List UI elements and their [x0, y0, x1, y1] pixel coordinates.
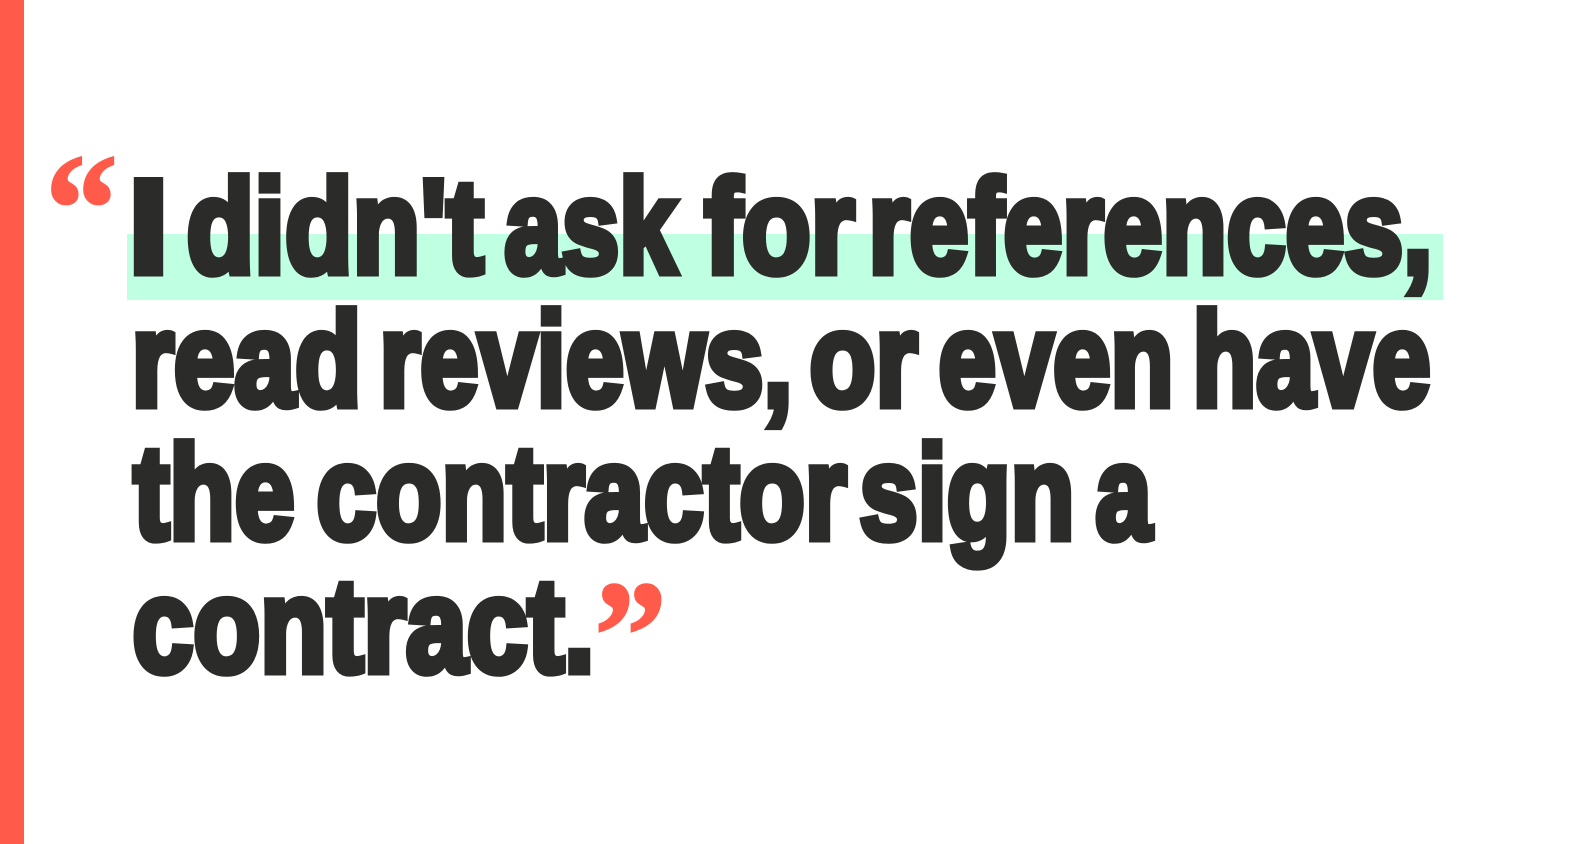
line 1: references,	[868, 154, 1432, 302]
line 3: a	[1096, 420, 1152, 568]
highlight behind first line	[127, 234, 1443, 300]
line 1: I	[128, 154, 168, 302]
line 1	[128, 154, 1432, 302]
left accent bar	[0, 0, 24, 844]
line 1: didn't	[186, 154, 484, 302]
line 4: contract.	[132, 552, 594, 700]
line 1: for	[704, 154, 854, 302]
opening quotation mark: “	[45, 122, 118, 295]
line 3: contractor	[316, 420, 846, 568]
line 3: the	[134, 420, 294, 568]
line 3: sign	[860, 420, 1074, 568]
line 2: have	[1192, 286, 1430, 434]
quote text	[128, 154, 1432, 700]
line 3	[134, 420, 1152, 568]
line 2: even	[938, 286, 1174, 434]
line 2: read	[132, 286, 362, 434]
line 2: reviews,	[380, 286, 792, 434]
line 2	[132, 286, 1430, 434]
line 1: ask	[504, 154, 677, 302]
line 2: or	[810, 286, 918, 434]
closing quotation mark: ”	[594, 549, 667, 722]
